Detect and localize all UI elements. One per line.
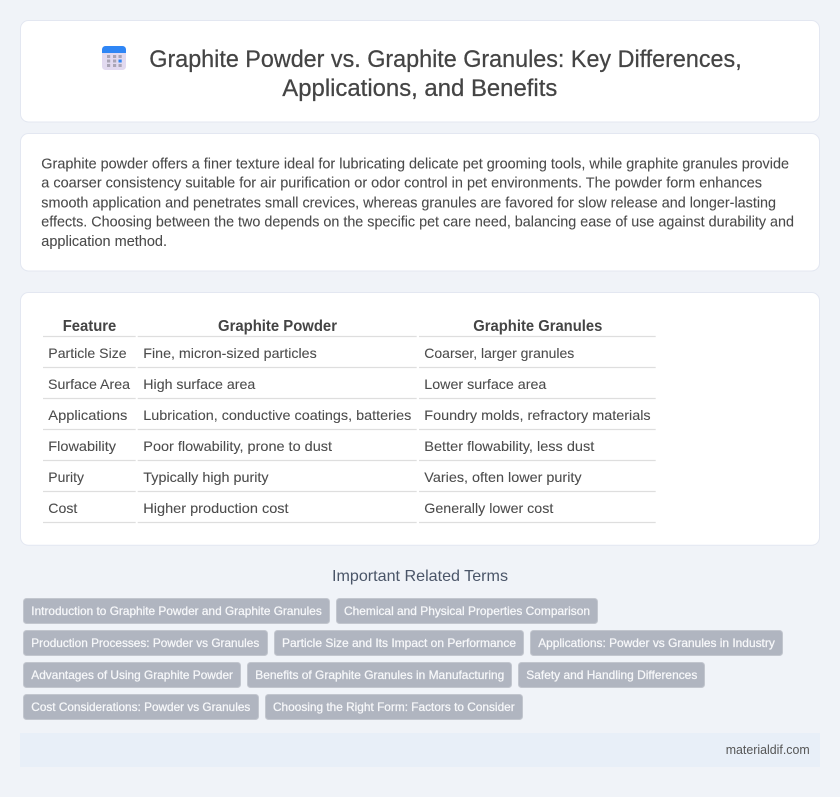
related terms tags (24, 598, 782, 720)
tag: Introduction to Graphite Powder and Graphite Granules (31, 604, 322, 618)
footer bar: materialdif.com (726, 742, 810, 757)
row: surface area (48, 376, 547, 392)
row: cost (48, 500, 553, 516)
row: flowability: Better flowability, less dust (424, 438, 594, 454)
panel: summary paragraph: smooth application and penetrates small crevices, whereas granules are favored for slow release and longer-lasting (41, 195, 776, 211)
row: surface area: Surface Area (48, 376, 130, 392)
panel: summary paragraph: Graphite powder offers a finer texture ideal for lubricating delicate pet grooming tools, while graphite granules provide (41, 156, 789, 172)
row: applications: Foundry molds, refractory materials (424, 407, 651, 423)
panel: summary paragraph: application method. (41, 234, 167, 250)
table header (63, 318, 602, 335)
table header: Graphite Powder (218, 318, 337, 335)
tag (518, 662, 704, 688)
row: surface area: Lower surface area (424, 376, 547, 392)
row: purity (48, 469, 582, 485)
tag: Applications: Powder vs Granules in Industry (538, 636, 775, 650)
title (149, 46, 742, 102)
row: purity: Varies, often lower purity (424, 469, 582, 485)
tag (530, 630, 782, 656)
tag: Production Processes: Powder vs Granules (31, 636, 259, 650)
row: flowability: Poor flowability, prone to dust (143, 438, 332, 454)
tag: Cost Considerations: Powder vs Granules (31, 700, 250, 714)
row: purity: Purity (48, 469, 84, 485)
table header: Feature (63, 318, 116, 335)
footer bar (20, 733, 820, 767)
tag (266, 694, 522, 720)
icon: calendar grid (102, 46, 126, 70)
tag: Chemical and Physical Properties Comparison (344, 604, 590, 618)
tag (248, 662, 512, 688)
heading: important related terms: Important Related Terms (332, 568, 508, 585)
row: particle size (48, 345, 574, 361)
tag (24, 630, 268, 656)
row: cost: Higher production cost (143, 500, 289, 516)
row: applications (48, 407, 651, 423)
panel: summary paragraph: a coarser consistency suitable for air purification or odor control in pet environments. The powder form enhances (41, 175, 762, 191)
row: particle size: Fine, micron-sized particles (143, 345, 317, 361)
title: Applications, and Benefits (282, 75, 557, 102)
tag: Safety and Handling Differences (526, 668, 697, 682)
panel: summary paragraph (20, 134, 820, 271)
row: cost: Generally lower cost (424, 500, 553, 516)
panel: title card (20, 20, 820, 122)
table header: Graphite Granules (473, 318, 602, 335)
row: particle size: Particle Size (48, 345, 127, 361)
tag (24, 598, 330, 624)
tag (336, 598, 598, 624)
row: cost: Cost (48, 500, 77, 516)
tag: Choosing the Right Form: Factors to Consider (273, 700, 515, 714)
tag: Benefits of Graphite Granules in Manufacturing (255, 668, 504, 682)
tag (24, 662, 240, 688)
tag (274, 630, 524, 656)
panel: summary paragraph: effects. Choosing between the two depends on the specific pet care need, balancing ease of use against durability and (41, 214, 794, 230)
row: flowability (48, 438, 594, 454)
row: purity: Typically high purity (143, 469, 269, 485)
row: applications: Lubrication, conductive coatings, batteries (143, 407, 411, 423)
row: surface area: High surface area (143, 376, 256, 392)
tag: Particle Size and Its Impact on Performance (282, 636, 516, 650)
row: applications: Applications (48, 407, 127, 423)
tag: Advantages of Using Graphite Powder (31, 668, 233, 682)
panel: comparison table (20, 292, 820, 545)
row: flowability: Flowability (48, 438, 116, 454)
title: Graphite Powder vs. Graphite Granules: Key Differences, (149, 46, 742, 73)
row: particle size: Coarser, larger granules (424, 345, 574, 361)
tag (24, 694, 258, 720)
